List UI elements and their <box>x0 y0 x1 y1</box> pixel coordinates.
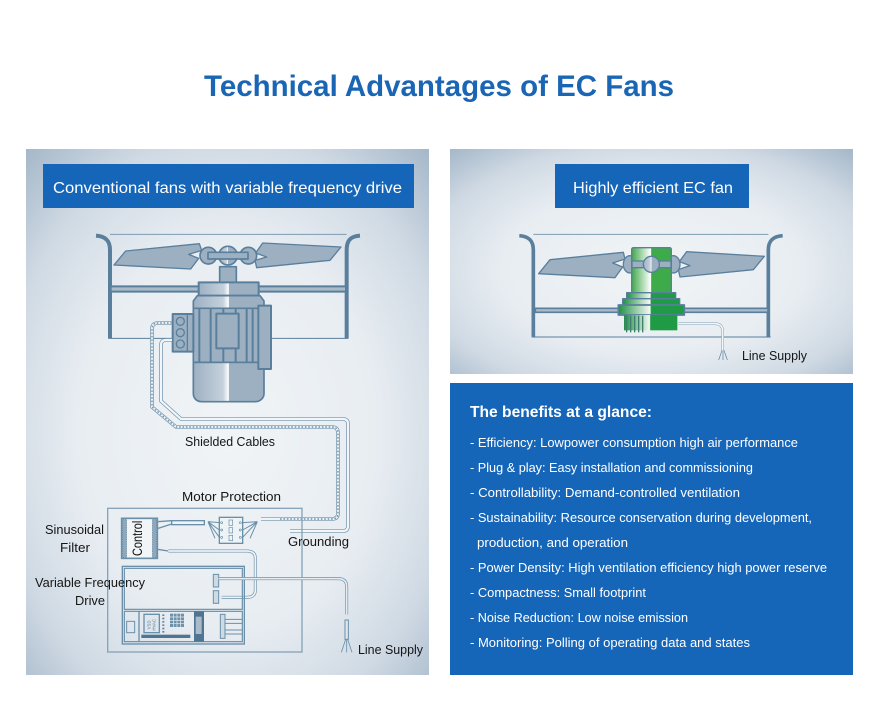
heading: conventional fans: Conventional fans with variable frequency drive <box>53 180 402 197</box>
benefits list <box>470 436 827 650</box>
benefits list: - Controllability: Demand-controlled ventilation <box>470 486 740 500</box>
benefits list: - Compactness: Small footprint <box>470 586 647 600</box>
label: shielded cables: Shielded Cables <box>185 435 275 449</box>
label: motor protection: Motor Protection <box>182 490 281 504</box>
green motor <box>618 248 684 332</box>
line supply cable <box>219 579 352 652</box>
diagram: fan with motor <box>96 234 360 402</box>
sinusoidal filter control block <box>122 518 157 558</box>
label: line supply: Line Supply <box>358 643 424 657</box>
benefits heading: The benefits at a glance: <box>470 404 652 421</box>
variable frequency drive <box>122 566 244 644</box>
variable frequency drive: HVAC <box>151 619 156 631</box>
panel: benefits <box>450 383 853 675</box>
heading: EC fan <box>555 164 749 208</box>
benefits list: - Plug & play: Easy installation and commissioning <box>470 461 753 475</box>
sinusoidal filter control block: Control <box>129 521 145 556</box>
label: grounding: Grounding <box>288 535 349 549</box>
label: sinusoidal filter <box>45 523 104 555</box>
label: sinusoidal filter: Filter <box>60 541 90 555</box>
benefits list: - Monitoring: Polling of operating data and states <box>470 636 750 650</box>
grounding cable <box>161 340 348 531</box>
benefits list: - Noise Reduction: Low noise emission <box>470 611 688 625</box>
line supply cable <box>678 324 727 360</box>
panel: conventional fans <box>26 149 429 675</box>
variable frequency drive: VSD <box>146 620 151 629</box>
title: Technical Advantages of EC Fans <box>204 70 674 103</box>
diagram: control cabinet <box>108 508 352 652</box>
benefits list: production, and operation <box>477 536 628 550</box>
label: variable frequency drive: Variable Frequency <box>35 576 146 590</box>
motor protection contactor <box>208 517 257 543</box>
label: variable frequency drive: Drive <box>75 594 105 608</box>
diagram: EC fan <box>519 234 783 360</box>
benefits list: - Efficiency: Lowpower consumption high air performance <box>470 436 798 450</box>
label: line supply: Line Supply <box>742 349 808 363</box>
heading: EC fan: Highly efficient EC fan <box>573 180 733 197</box>
panel: EC fan <box>450 149 853 374</box>
shielded cable from motor to cabinet <box>152 323 338 519</box>
label: variable frequency drive <box>35 576 146 608</box>
heading: conventional fans <box>43 164 414 208</box>
benefits list: - Power Density: High ventilation efficiency high power reserve <box>470 561 827 575</box>
label: sinusoidal filter: Sinusoidal <box>45 523 104 537</box>
benefits list: - Sustainability: Resource conservation during development, <box>470 511 812 525</box>
